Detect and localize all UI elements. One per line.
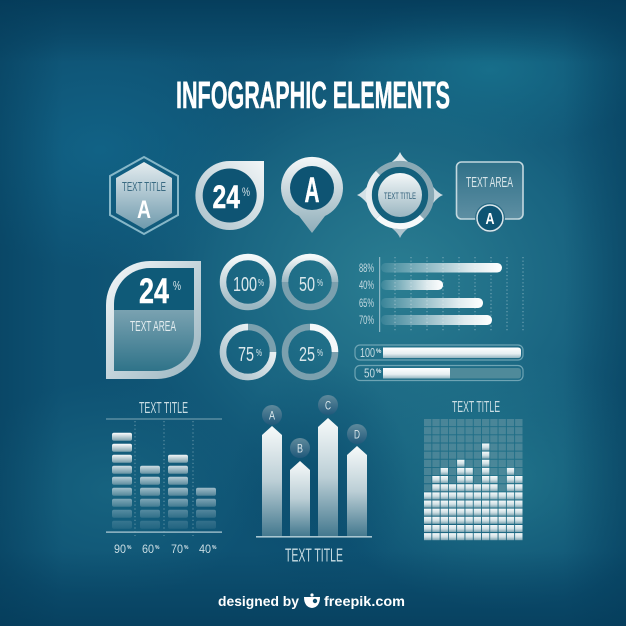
arrow column chart: D	[354, 428, 360, 442]
equalizer grid chart	[424, 399, 522, 541]
donut 25%: 25	[299, 344, 315, 366]
donut 25%	[285, 327, 335, 377]
progress bar 50%: %	[376, 369, 382, 375]
droplet percentage badge: 24	[212, 179, 240, 215]
compass badge	[357, 152, 443, 238]
leaf panel: %	[173, 278, 181, 293]
hexagon badge: TEXT TITLE	[122, 179, 166, 194]
progress bar 100%: 100	[360, 346, 375, 360]
arrow column chart: A	[269, 408, 275, 422]
leaf panel	[106, 261, 201, 379]
footer credit: designed by	[218, 594, 300, 609]
map pin badge: A	[304, 171, 320, 210]
horizontal bar chart: 40%	[359, 280, 374, 292]
hexagon badge	[110, 157, 178, 234]
stacked segment chart: TEXT TITLE	[139, 400, 188, 417]
horizontal bar chart: 70%	[359, 315, 374, 327]
donut 100%	[223, 257, 273, 307]
arrow column chart: TEXT TITLE	[285, 544, 343, 566]
stacked segment chart: 70	[171, 542, 183, 556]
donut 50%: %	[317, 278, 323, 289]
droplet percentage badge	[195, 161, 264, 230]
leaf panel: 24	[139, 272, 169, 311]
donut 50%: 50	[299, 274, 315, 296]
equalizer grid chart: TEXT TITLE	[452, 399, 500, 416]
droplet percentage badge: %	[242, 185, 250, 199]
stacked segment chart: %	[127, 545, 132, 551]
progress bar 100%: %	[376, 349, 382, 355]
donut 50%	[285, 257, 335, 307]
text area card: A	[486, 211, 495, 228]
horizontal bar chart: 65%	[359, 298, 374, 310]
stacked segment chart: %	[184, 545, 189, 551]
horizontal bar chart	[359, 257, 523, 332]
donut 75%: 75	[238, 344, 254, 366]
donut 75%	[223, 327, 273, 377]
donut 100%: 100	[233, 274, 257, 296]
hexagon badge: A	[137, 196, 151, 224]
text area card: TEXT AREA	[466, 174, 513, 191]
footer credit	[218, 593, 405, 609]
arrow column chart	[256, 395, 372, 566]
text area card	[456, 162, 523, 233]
stacked segment chart: 90	[114, 542, 126, 556]
stacked segment chart: %	[155, 545, 160, 551]
stacked segment chart	[106, 400, 222, 556]
progress bar 50%: 50	[364, 366, 375, 380]
map pin badge	[281, 157, 343, 233]
donut 25%: %	[317, 348, 323, 359]
compass badge: TEXT TITLE	[384, 191, 416, 202]
arrow column chart: C	[325, 398, 331, 412]
icon: freepik logo	[304, 593, 320, 608]
progress bar 100%	[355, 345, 523, 360]
donut 75%: %	[256, 348, 262, 359]
footer credit: freepik.com	[324, 594, 405, 609]
stacked segment chart: %	[212, 545, 217, 551]
stacked segment chart: 40	[199, 542, 211, 556]
stacked segment chart: 60	[142, 542, 154, 556]
progress bar 50%	[355, 366, 523, 380]
horizontal bar chart: 88%	[359, 263, 374, 275]
donut 100%: %	[258, 278, 264, 289]
arrow column chart: B	[297, 442, 303, 456]
leaf panel: TEXT AREA	[130, 318, 176, 335]
